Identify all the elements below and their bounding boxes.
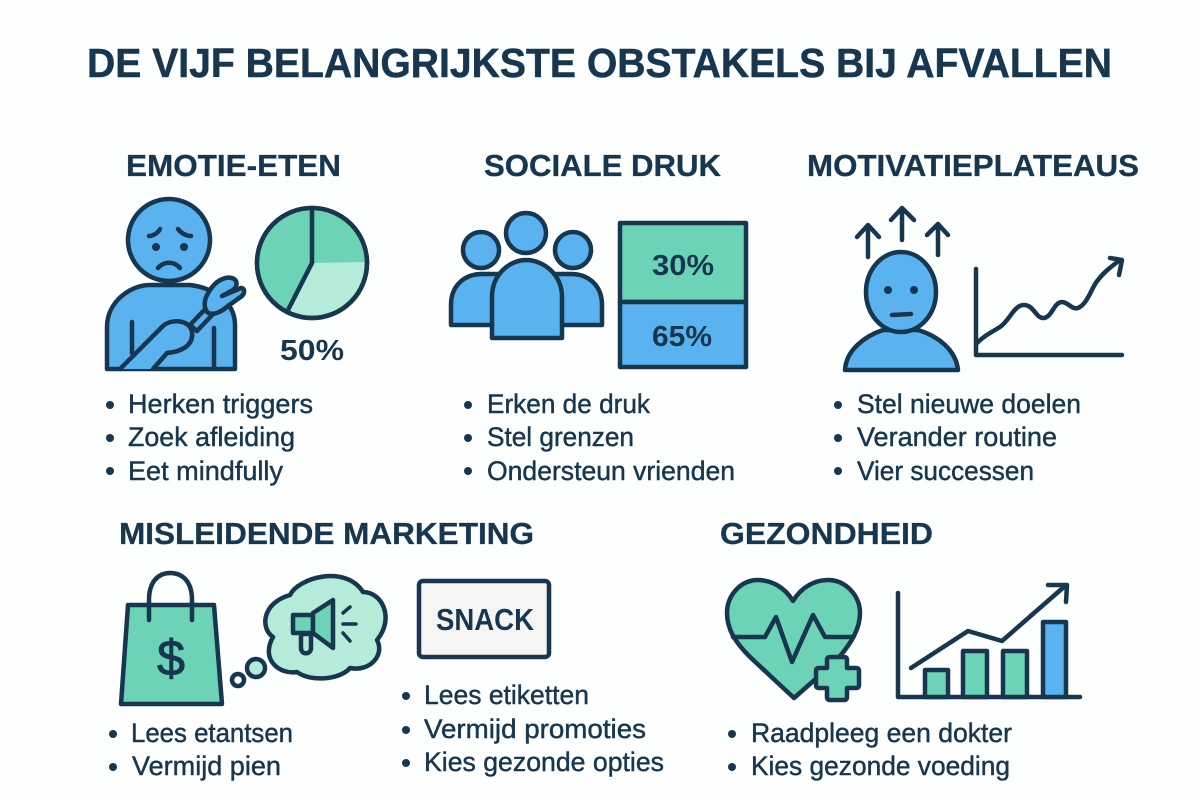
- panel: sociale druk: [451, 148, 746, 486]
- bullet list: Eet mindfully: [128, 456, 283, 486]
- bullet list: [106, 389, 313, 486]
- heading: gezondheid: GEZONDHEID: [720, 516, 933, 551]
- bullet list: [728, 718, 1012, 781]
- bullet list: Stel nieuwe doelen: [857, 389, 1081, 419]
- icon: thought bubble with megaphone: [232, 576, 386, 686]
- bullet list: left: Lees etantsen: [131, 718, 293, 748]
- pie chart: [257, 208, 367, 318]
- bullet list: Raadpleeg een dokter: [751, 718, 1012, 748]
- bullet list: left: Vermijd pien: [132, 751, 281, 781]
- icon: shopping bag: $: [157, 630, 185, 686]
- stacked bar 30% / 65%: [620, 223, 746, 367]
- line chart: [976, 258, 1122, 355]
- panel: misleidende marketing: [109, 516, 664, 781]
- icon: shopping bag: [121, 573, 222, 704]
- snack label: SNACK: [436, 602, 535, 637]
- bullet list: left: [109, 718, 293, 781]
- bullet list: Verander routine: [857, 422, 1057, 452]
- stat: 65%: 65%: [652, 321, 712, 353]
- bullet list: Stel grenzen: [487, 422, 634, 452]
- bullet list: right: Vermijd promoties: [424, 714, 646, 744]
- icon: group of people: [451, 213, 602, 338]
- heading: emotie-eten: EMOTIE-ETEN: [126, 148, 341, 183]
- bullet list: Ondersteun vrienden: [487, 456, 735, 486]
- stat: 50%: 50%: [280, 335, 344, 367]
- bullet list: right: [402, 680, 664, 777]
- bullet list: right: Kies gezonde opties: [424, 747, 664, 777]
- panel: motivatieplateaus: [807, 148, 1139, 486]
- title: DE VIJF BELANGRIJKSTE OBSTAKELS BIJ AFVALLEN: [87, 40, 1112, 86]
- heading: motivatieplateaus: MOTIVATIEPLATEAUS: [807, 148, 1139, 183]
- stat: 30%: 30%: [652, 250, 714, 282]
- snack label: [419, 581, 549, 657]
- bullet list: Herken triggers: [128, 389, 313, 419]
- panel: gezondheid: [720, 516, 1080, 781]
- icon: heart with pulse and plus: [727, 580, 860, 700]
- icon: sad person with fork: [107, 199, 244, 369]
- bullet list: [464, 389, 735, 486]
- bullet list: Kies gezonde voeding: [751, 751, 1010, 781]
- bullet list: Erken de druk: [487, 389, 650, 419]
- bullet list: Vier successen: [857, 456, 1034, 486]
- bullet list: [834, 389, 1081, 486]
- icon: person with arrows: [845, 208, 958, 370]
- bar chart with trend arrow: [898, 585, 1080, 697]
- panel: emotie-eten: [106, 148, 367, 486]
- heading: sociale druk: SOCIALE DRUK: [484, 148, 722, 183]
- heading: misleidende marketing: MISLEIDENDE MARKETING: [119, 516, 534, 551]
- bullet list: Zoek afleiding: [128, 422, 295, 452]
- bullet list: right: Lees etiketten: [424, 680, 589, 710]
